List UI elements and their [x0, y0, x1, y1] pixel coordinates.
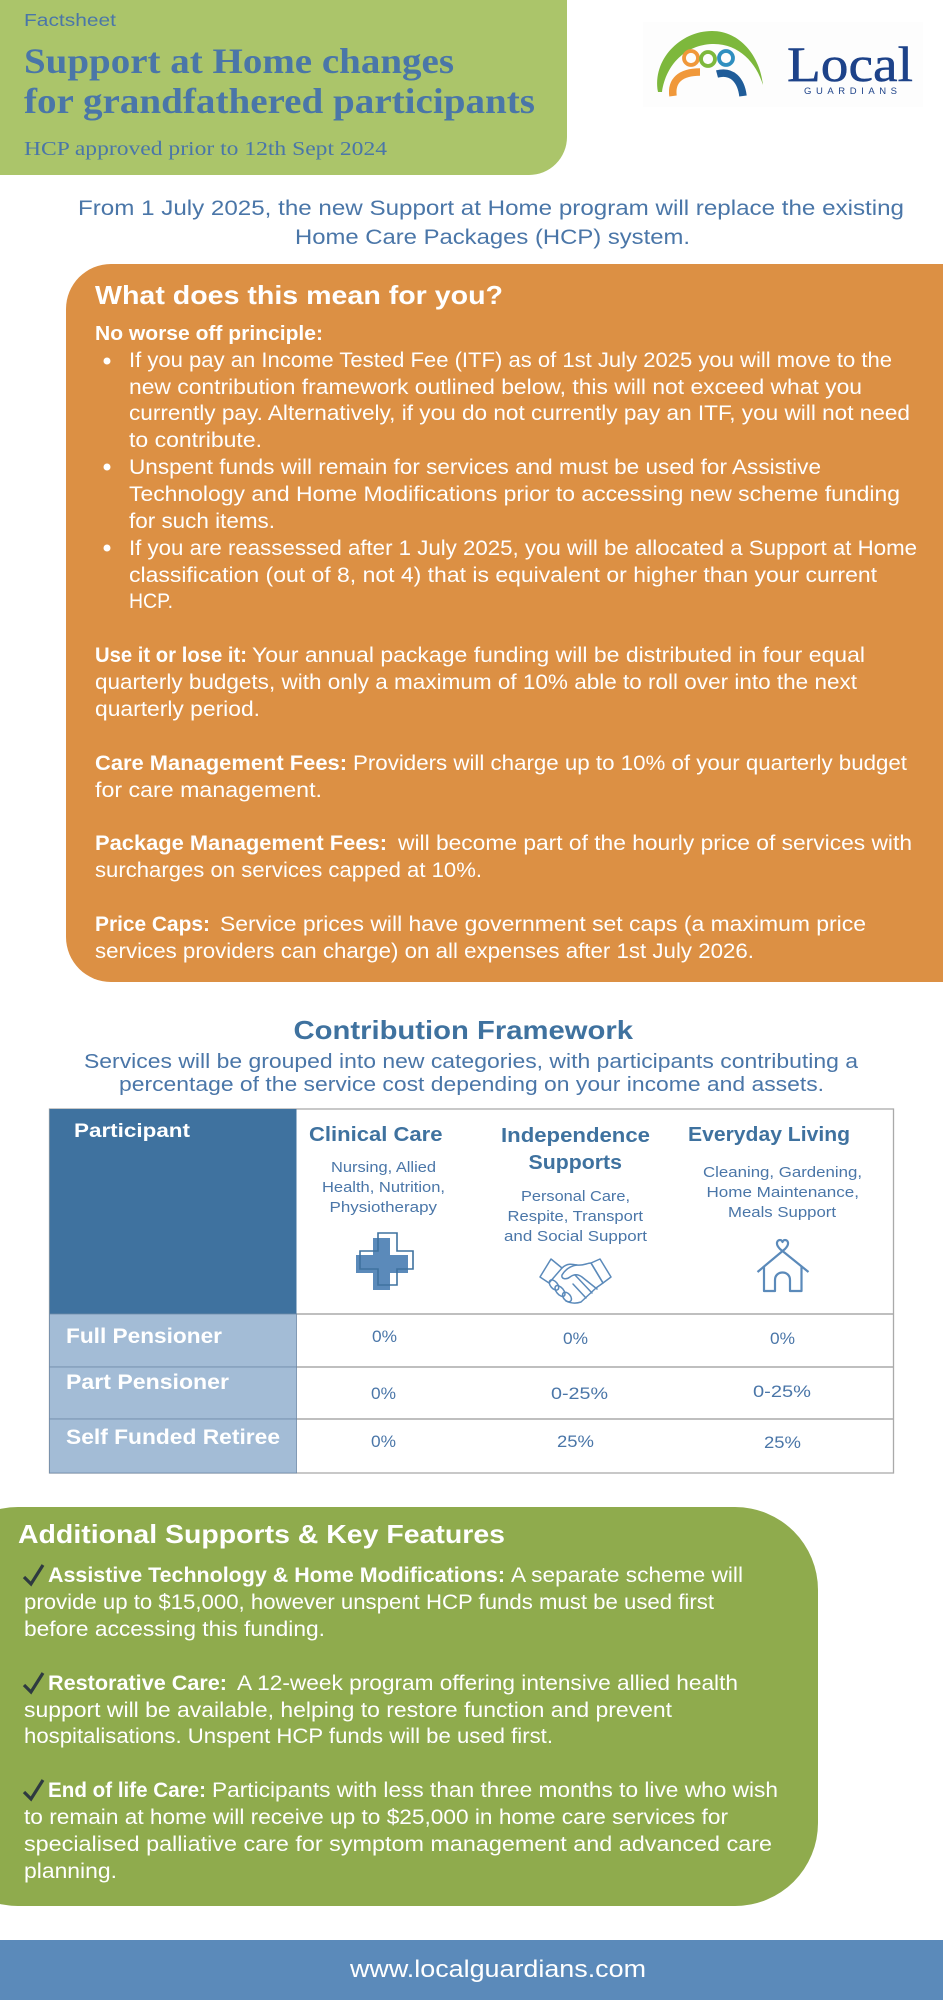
column: everyday living: Cleaning, Gardening, — [703, 1164, 862, 1181]
panel: what does this mean for you — [66, 264, 943, 982]
package management fees: will become part of the hourly price of services with — [397, 831, 912, 855]
column: everyday living: Everyday Living — [688, 1124, 850, 1146]
column: clinical care — [309, 1124, 445, 1290]
use it or lose it: quarterly budgets, with only a maximum of 10% able to roll over into the next — [95, 670, 857, 694]
row label: full pensioner — [50, 1314, 296, 1367]
row values: full pensioner: 0% — [563, 1329, 588, 1348]
column: independence supports: and Social Support — [504, 1228, 648, 1245]
row values: full pensioner — [372, 1327, 795, 1348]
logo wordmark: Local — [787, 36, 913, 92]
no worse off principle list: No worse off principle: — [95, 323, 323, 345]
price caps: Service prices will have government set caps (a maximum price — [220, 912, 866, 936]
icon: check mark — [24, 1565, 43, 1584]
row values: part pensioner — [371, 1382, 811, 1403]
footer bar: www.localguardians.com — [349, 1956, 646, 1983]
row label: full pensioner: Full Pensioner — [66, 1324, 223, 1348]
no worse off principle list: classification (out of 8, not 4) that is equivalent or higher than your current — [129, 563, 877, 587]
title: for grandfathered participants — [24, 81, 535, 121]
care management fees: Providers will charge up to 10% of your quarterly budget — [353, 751, 907, 775]
row label: self funded retiree — [50, 1419, 296, 1473]
contribution framework intro — [84, 1051, 859, 1096]
column: everyday living: Home Maintenance, — [706, 1184, 859, 1201]
column: clinical care: Health, Nutrition, — [322, 1179, 445, 1196]
use it or lose it: quarterly period. — [95, 697, 260, 721]
icon: blue figure — [717, 73, 743, 96]
panel: additional supports and key features — [0, 1507, 818, 1906]
feature: end of life care: End of life Care: — [48, 1778, 206, 1802]
icon: house with heart — [758, 1240, 808, 1291]
row label: part pensioner — [50, 1367, 296, 1419]
header panel — [0, 0, 567, 175]
icon: orange figure — [673, 72, 700, 96]
panel heading: Additional Supports & Key Features — [18, 1519, 505, 1549]
row values: full pensioner: 0% — [372, 1327, 397, 1346]
use it or lose it: Your annual package funding will be distributed in four equal — [252, 643, 865, 667]
feature: assistive technology — [24, 1563, 743, 1641]
column: clinical care: Clinical Care — [309, 1124, 442, 1146]
care management fees: for care management. — [95, 778, 322, 802]
contribution framework intro: Services will be grouped into new categories, with participants contributing a — [84, 1051, 859, 1073]
feature: assistive technology: provide up to $15,000, however unspent HCP funds must be used first — [24, 1590, 714, 1614]
package management fees — [95, 831, 912, 882]
no worse off principle list — [95, 323, 917, 613]
package management fees: surcharges on services capped at 10%. — [95, 858, 482, 882]
icon: check mark — [24, 1673, 43, 1692]
no worse off principle list: to contribute. — [129, 428, 262, 452]
row values: part pensioner: 0-25% — [753, 1382, 811, 1401]
feature: restorative care: Restorative Care: — [48, 1671, 227, 1695]
no worse off principle list: HCP. — [129, 589, 173, 613]
feature: restorative care: hospitalisations. Unspent HCP funds will be used first. — [24, 1724, 553, 1748]
feature: assistive technology: Assistive Technology & Home Modifications: — [48, 1563, 505, 1587]
contribution framework intro: percentage of the service cost depending on your income and assets. — [119, 1074, 824, 1096]
column: clinical care: Nursing, Allied — [331, 1159, 436, 1176]
column: everyday living: Meals Support — [728, 1204, 837, 1221]
icon: handshake — [540, 1259, 611, 1303]
intro text: From 1 July 2025, the new Support at Home program will replace the existing — [78, 196, 904, 220]
row label: part pensioner: Part Pensioner — [66, 1370, 230, 1394]
feature: assistive technology: A separate scheme will — [511, 1563, 743, 1587]
no worse off principle list: for such items. — [129, 509, 275, 533]
subtitle: HCP approved prior to 12th Sept 2024 — [24, 138, 387, 160]
no worse off principle list: Unspent funds will remain for services and must be used for Assistive — [129, 455, 821, 479]
column: independence supports: Supports — [528, 1152, 622, 1174]
label: factsheet: Factsheet — [24, 10, 116, 30]
feature: restorative care — [24, 1671, 738, 1748]
panel heading: What does this mean for you? — [95, 280, 503, 310]
row values: part pensioner: 0% — [371, 1384, 396, 1403]
no worse off principle list: If you are reassessed after 1 July 2025, you will be allocated a Support at Home — [129, 536, 917, 560]
header cell: participant: Participant — [74, 1121, 191, 1142]
no worse off principle list: If you pay an Income Tested Fee (ITF) as of 1st July 2025 you will move to the — [129, 348, 892, 372]
intro text: Home Care Packages (HCP) system. — [295, 225, 690, 249]
icon: check mark — [24, 1780, 43, 1799]
contribution framework heading: Contribution Framework — [294, 1015, 634, 1045]
header cell: participant — [50, 1109, 296, 1314]
contribution table — [50, 1109, 894, 1473]
row values: self funded retiree: 25% — [764, 1433, 801, 1452]
feature: end of life care: specialised palliative care for symptom management and advanced care — [24, 1832, 772, 1856]
price caps: services providers can charge) on all expenses after 1st July 2026. — [95, 939, 754, 963]
feature: end of life care: planning. — [24, 1859, 117, 1883]
no worse off principle list: currently pay. Alternatively, if you do not currently pay an ITF, you will not need — [129, 401, 910, 425]
icon: medical cross — [356, 1233, 413, 1290]
feature: end of life care — [24, 1778, 778, 1883]
package management fees: Package Management Fees: — [95, 831, 387, 855]
row values: self funded retiree — [371, 1432, 801, 1452]
price caps — [95, 912, 866, 963]
column: independence supports: Independence — [501, 1125, 650, 1147]
column: independence supports: Respite, Transport — [508, 1208, 644, 1225]
logo: Local Guardians — [643, 22, 923, 107]
column: independence supports: Personal Care, — [521, 1188, 630, 1205]
use it or lose it: Use it or lose it: — [95, 643, 247, 667]
price caps: Price Caps: — [95, 912, 210, 936]
column: clinical care: Physiotherapy — [330, 1199, 438, 1216]
care management fees — [95, 751, 907, 802]
care management fees: Care Management Fees: — [95, 751, 347, 775]
no worse off principle list: new contribution framework outlined below, this will not exceed what you — [129, 375, 862, 399]
title: Support at Home changes — [24, 41, 454, 81]
row values: full pensioner: 0% — [770, 1329, 795, 1348]
row values: self funded retiree: 25% — [557, 1432, 594, 1451]
use it or lose it — [95, 643, 865, 721]
logo tagline: GUARDIANS — [804, 86, 897, 97]
icon: three heads — [684, 51, 733, 66]
column: independence supports — [501, 1125, 650, 1303]
column: everyday living — [688, 1124, 862, 1291]
row values: self funded retiree: 0% — [371, 1432, 396, 1451]
row label: self funded retiree: Self Funded Retiree — [66, 1425, 280, 1449]
title — [24, 41, 535, 121]
row values: part pensioner: 0-25% — [551, 1384, 608, 1403]
footer bar — [0, 1940, 943, 2000]
feature: assistive technology: before accessing this funding. — [24, 1617, 325, 1641]
intro text — [78, 196, 904, 249]
feature: restorative care: A 12-week program offering intensive allied health — [237, 1671, 738, 1695]
feature: end of life care: Participants with less than three months to live who wish — [212, 1778, 778, 1802]
feature: restorative care: support will be available, helping to restore function and prevent — [24, 1698, 672, 1722]
no worse off principle list: Technology and Home Modifications prior to accessing new scheme funding — [129, 482, 900, 506]
icon: green brush arc — [657, 31, 763, 92]
feature: end of life care: to remain at home will receive up to $25,000 in home care services for — [24, 1805, 728, 1829]
